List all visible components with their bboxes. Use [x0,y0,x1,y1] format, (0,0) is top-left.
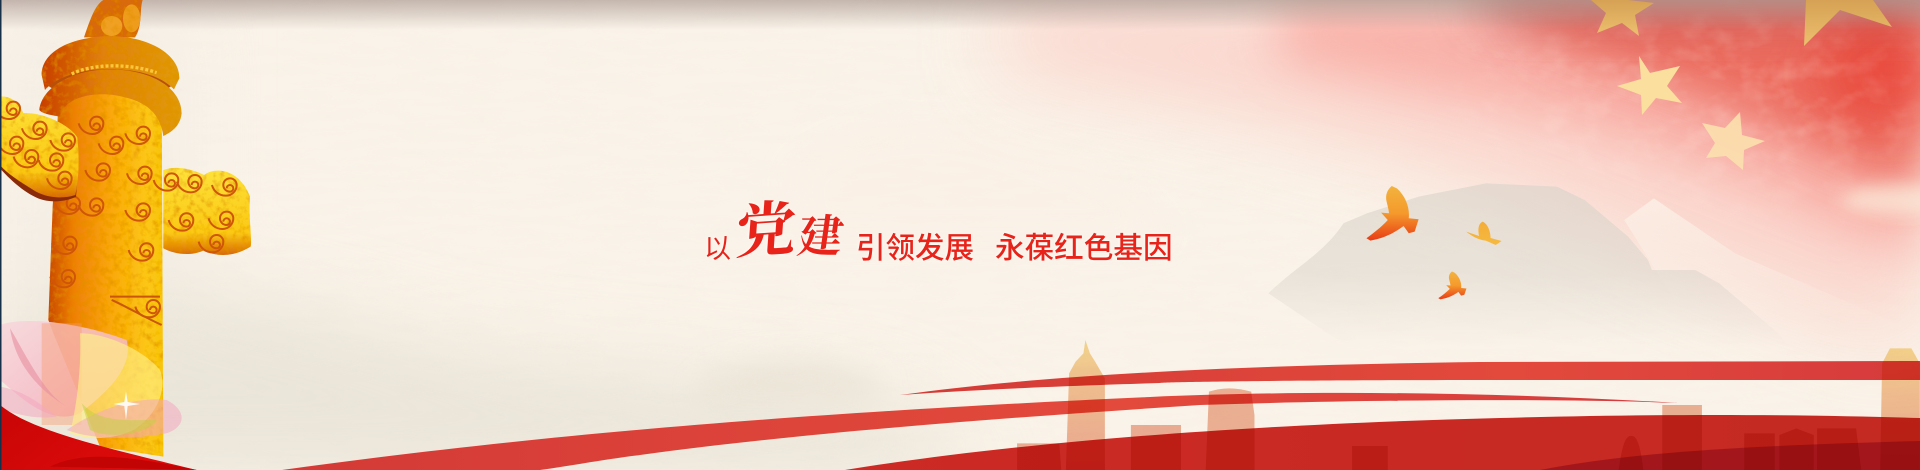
low building [1017,443,1061,470]
bird small yellow [1466,222,1502,245]
dome [1619,436,1643,470]
ribbons [282,361,1920,470]
left red ribbon [0,405,197,470]
grey peak [1268,183,1790,347]
stars [1591,0,1892,170]
birds [1366,186,1502,299]
star 4 [1702,112,1765,170]
lower pink petal [0,387,182,438]
beast top [84,0,143,37]
city skyline [1017,340,1920,470]
slogan [704,196,1173,266]
huabiao column [0,0,251,470]
right tower [1880,348,1920,470]
shaft [48,90,163,457]
block [1352,446,1388,470]
bird small orange [1438,271,1466,299]
center petals [10,328,67,407]
calligraphic word: 党: 党 [733,196,799,266]
sparkle [113,392,140,420]
word: 以: 以 [704,234,731,264]
left misty hills [0,0,1000,470]
star 1 [1591,0,1654,36]
shaft relief [50,117,162,325]
lotus flower [0,321,182,438]
phrase: 引领发展: 引领发展 [856,232,974,265]
dark under cap [45,62,175,98]
star 2 large [1804,0,1892,46]
bird large [1366,186,1419,241]
calligraphic word: 建: 建 [795,212,847,262]
middle ribbon [282,393,1678,470]
dark ribbon [1540,441,1920,470]
red watercolor wash [1000,0,1920,340]
upper dome [42,36,179,90]
tower [1066,340,1105,470]
lower ring [39,69,182,136]
right wing [154,168,251,255]
bead band [72,66,157,74]
left edge strip [0,0,2,470]
right building [1662,405,1702,470]
round building [1206,388,1254,470]
left wing [0,96,79,201]
star 3 [1617,56,1682,115]
right cluster [1744,428,1861,470]
large ribbon [845,415,1920,470]
upper thin ribbon [900,361,1920,395]
building [1131,425,1181,470]
translucent stripe [42,323,82,425]
back petal [0,321,128,417]
center misty hills [700,124,1170,400]
yellow petal [70,333,162,438]
top shadow band [0,0,1920,30]
phrase: 永葆红色基因: 永葆红色基因 [995,232,1173,265]
pale peak [1624,198,1920,333]
grey mountains [1268,183,1920,347]
